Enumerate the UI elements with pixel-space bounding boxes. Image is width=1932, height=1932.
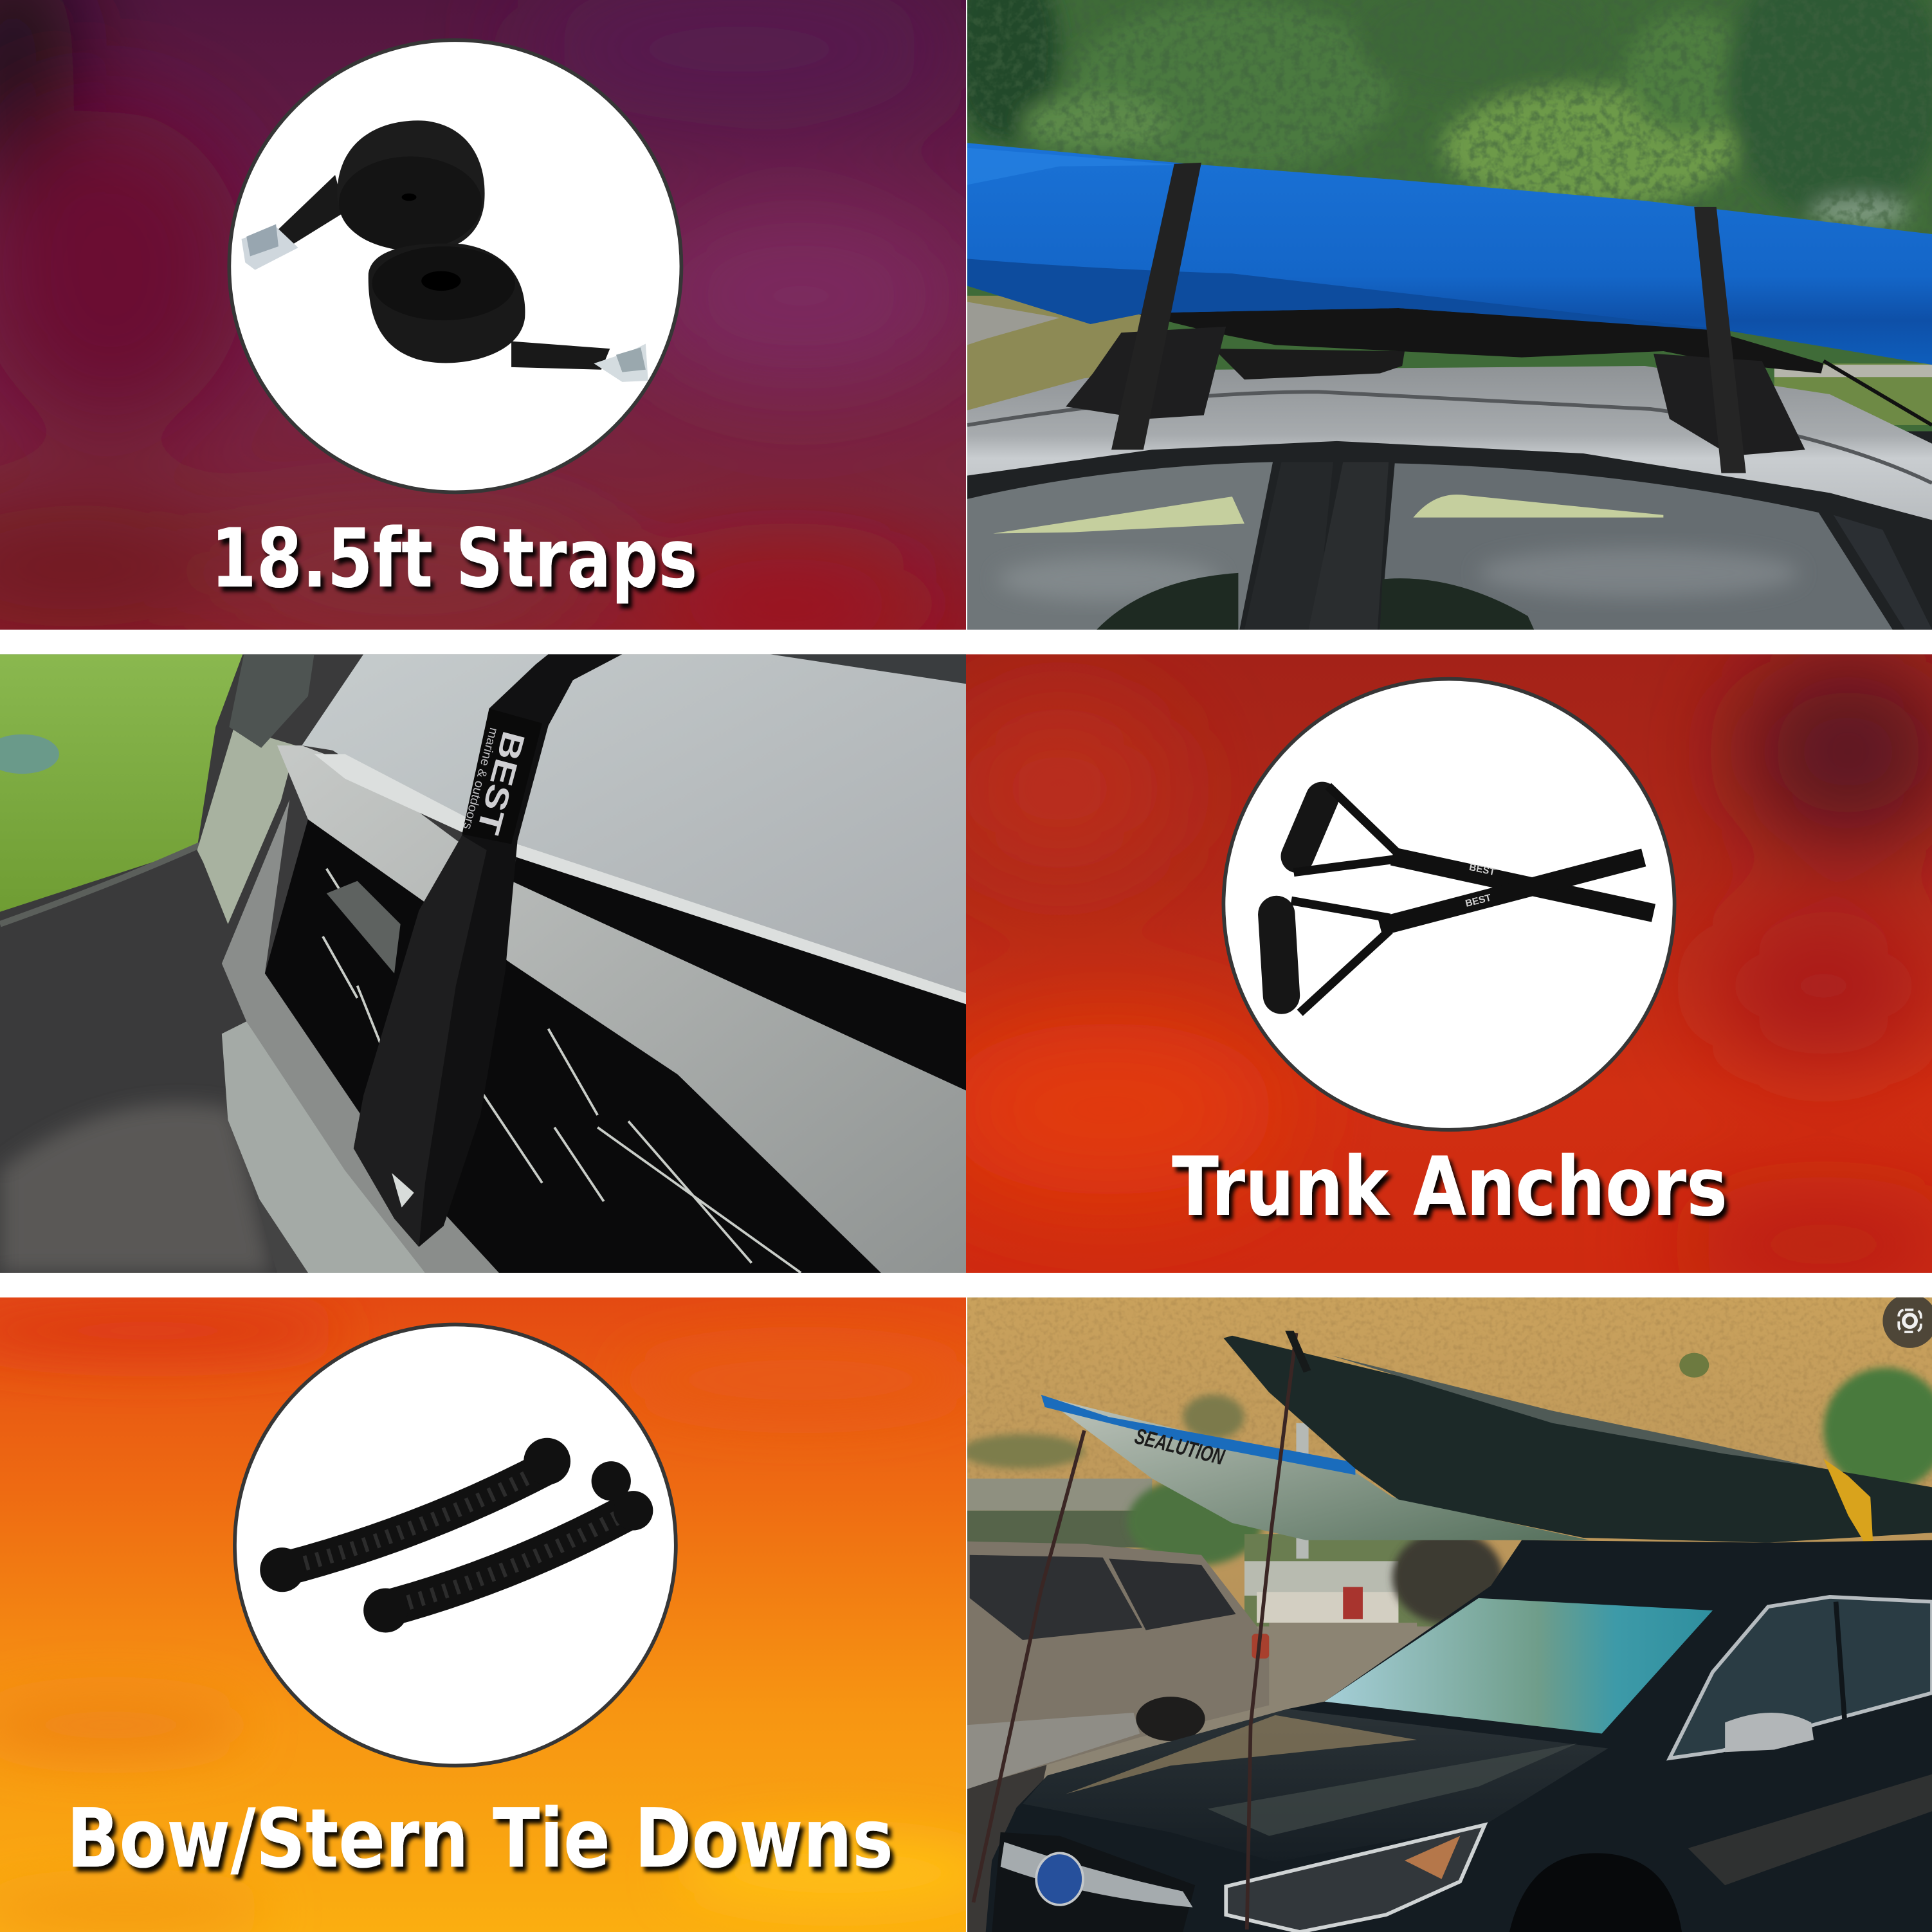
background trees bbox=[949, 0, 1932, 246]
rope bundle one bbox=[260, 1438, 570, 1592]
right buckle bbox=[594, 344, 648, 382]
lower strap coil bbox=[369, 243, 525, 363]
windshield bbox=[1325, 1598, 1713, 1734]
white kayak: SEALUTION bbox=[1133, 1424, 1227, 1470]
door reflections bbox=[1688, 1774, 1932, 1885]
rear window bbox=[1834, 515, 1932, 630]
black saddle mat under kayak bbox=[1134, 305, 1823, 373]
car roof bbox=[967, 366, 1932, 520]
suv body bbox=[986, 1540, 1932, 1932]
heading: Trunk Anchors: Trunk Anchors bbox=[1172, 1140, 1727, 1234]
woven brand label: BEST bbox=[470, 727, 532, 838]
minivan bbox=[967, 1542, 1269, 1789]
image search icon bbox=[1882, 1294, 1932, 1348]
door pillars bbox=[1244, 462, 1333, 630]
headlight bbox=[229, 654, 314, 748]
parking lot bbox=[1269, 1623, 1417, 1706]
grille surround bbox=[222, 799, 499, 1273]
right foam block bbox=[1654, 354, 1805, 456]
lower bumper bar bbox=[277, 745, 966, 1273]
hanging webbing loop strap bbox=[354, 654, 622, 1247]
upper anchor strap bbox=[1294, 786, 1654, 913]
rope bundle two bbox=[363, 1461, 653, 1632]
strap product circle bbox=[229, 40, 681, 492]
upper trim bbox=[314, 754, 966, 1004]
trunk anchor product circle bbox=[1223, 679, 1675, 1130]
lower strap tail bbox=[511, 342, 610, 370]
hose bbox=[0, 845, 199, 924]
left kayak strap bbox=[1111, 163, 1201, 450]
left buckle bbox=[242, 224, 298, 270]
grass bbox=[0, 654, 242, 912]
grille bbox=[265, 819, 881, 1273]
heading: Bow/Stern Tie Downs: Bow/Stern Tie Downs bbox=[66, 1791, 893, 1886]
yellow kayak strap bbox=[1823, 1459, 1873, 1594]
side windows with chrome trim bbox=[1670, 1597, 1932, 1758]
left tie-down rope bbox=[973, 1430, 1084, 1902]
velcro roof pad bbox=[1214, 349, 1405, 379]
lower anchor strap bbox=[1277, 857, 1644, 1013]
lower bumper bbox=[222, 1021, 425, 1273]
upper strap tail bbox=[278, 175, 345, 244]
woven brand label: marine & outdoors bbox=[460, 726, 500, 831]
tie-down cord bbox=[1823, 361, 1932, 425]
golden hillside bbox=[967, 1297, 1932, 1618]
lawn and road behind car bbox=[967, 296, 1932, 425]
photo: kayaks tied down on dark SUV bbox=[961, 1294, 1932, 1932]
photo: kayak strapped on car roof bbox=[949, 0, 1932, 630]
lower anchor strap: BEST bbox=[1464, 892, 1493, 909]
car side panel bbox=[197, 727, 296, 924]
upper anchor strap: BEST bbox=[1468, 862, 1497, 878]
hood bbox=[302, 654, 966, 997]
rope product circle bbox=[235, 1325, 676, 1765]
upper strap coil bbox=[337, 120, 485, 251]
asphalt patch bbox=[0, 1104, 271, 1273]
blue kayak bbox=[967, 143, 1932, 365]
bow handle bbox=[1285, 1331, 1311, 1372]
wheel arch bbox=[1509, 1853, 1682, 1932]
panel: 18.5ft straps bbox=[0, 0, 966, 653]
heading: 18.5ft Straps: 18.5ft Straps bbox=[211, 511, 697, 606]
headlight bbox=[1226, 1825, 1485, 1932]
hood bbox=[1023, 1709, 1608, 1862]
panel: trunk anchors bbox=[936, 653, 1932, 1281]
right window bbox=[1380, 463, 1893, 630]
black channel bbox=[511, 853, 966, 1090]
panel: bow and stern tie downs bbox=[0, 1297, 998, 1932]
overpass and greenery bbox=[961, 1353, 1932, 1627]
left foam block bbox=[1066, 327, 1226, 419]
front grille and logo bbox=[992, 1832, 1195, 1932]
left window bbox=[967, 462, 1273, 630]
dark kayak bbox=[1223, 1336, 1932, 1543]
white kayak bbox=[1041, 1395, 1589, 1540]
right kayak strap bbox=[1694, 207, 1746, 473]
window frame bbox=[967, 432, 1932, 630]
woven brand label bbox=[460, 709, 542, 844]
photo: front hood loop strap bbox=[0, 654, 966, 1273]
right tie-down rope bbox=[1247, 1333, 1296, 1929]
side mirror bbox=[1725, 1713, 1814, 1752]
